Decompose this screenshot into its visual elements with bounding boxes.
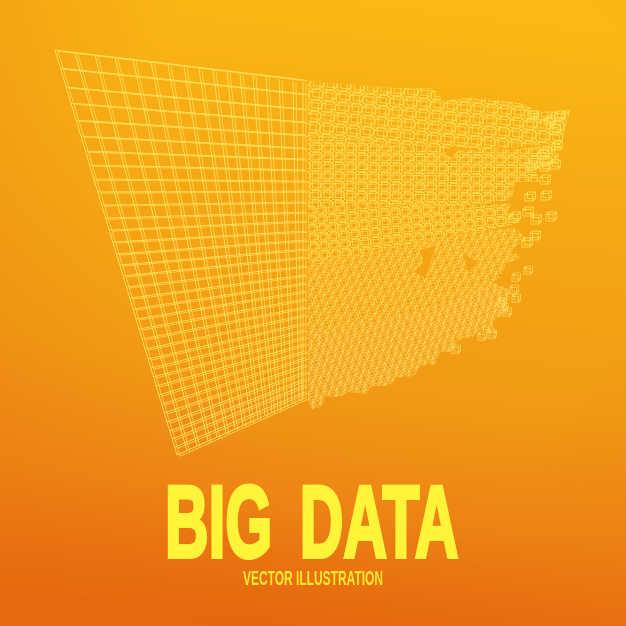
- subtitle: vector illustration: VECTOR ILLUSTRATION: [243, 568, 383, 590]
- title: BIG DATA: BIG DATA: [165, 465, 458, 579]
- wireframe data wall: flat left grid: [55, 50, 308, 456]
- wireframe data wall: scattering cubes on the right: [308, 81, 570, 409]
- outlying cubes: [452, 111, 566, 353]
